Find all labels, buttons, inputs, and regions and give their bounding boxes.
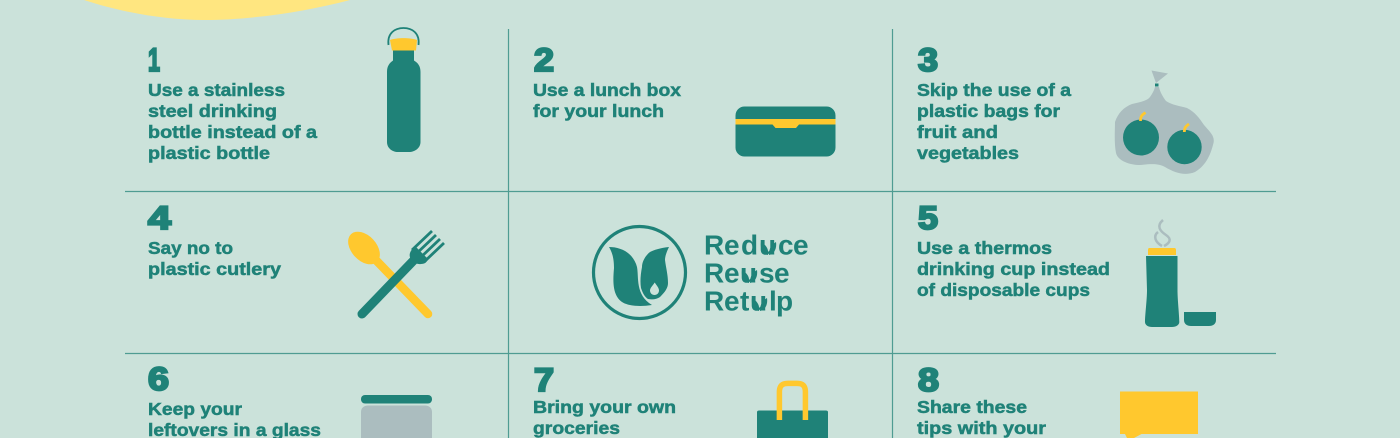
logo wordmark: Reuse — [704, 258, 790, 288]
logo wordmark: Retulp — [704, 286, 793, 316]
text: tip 2: Use a lunch box — [533, 80, 681, 100]
logo wordmark — [704, 230, 809, 316]
panel: tip 2 — [533, 42, 836, 156]
panel: tip 4 — [148, 200, 444, 314]
text: tip 5: Use a thermos — [917, 238, 1052, 258]
text: tip 4 — [148, 238, 281, 279]
icon: spoon and fork — [342, 226, 444, 314]
text: tip 7 — [533, 397, 676, 438]
text: tip 2 — [533, 80, 681, 121]
number 3: 3 — [918, 42, 938, 78]
text: tip 4: plastic cutlery — [148, 259, 281, 279]
text: tip 3 — [917, 80, 1071, 163]
number 1: 1 — [148, 42, 160, 78]
text: tip 7: Bring your own — [533, 397, 676, 417]
number 5: 5 — [918, 200, 938, 236]
number 4: 4 — [148, 200, 171, 236]
text: tip 3: vegetables — [917, 143, 1019, 163]
text: tip 3: fruit and — [917, 122, 998, 142]
text: tip 8: tips with your — [917, 418, 1046, 438]
panel: tip 3 — [917, 42, 1214, 174]
text: tip 1: steel drinking — [148, 101, 277, 121]
text: tip 1: plastic bottle — [148, 143, 270, 163]
panel: tip 8 — [917, 362, 1198, 438]
number 6: 6 — [148, 361, 169, 397]
panel: tip 6 — [148, 361, 432, 438]
icon: glass jar — [361, 395, 432, 438]
text: tip 7: groceries — [533, 418, 620, 438]
logo wordmark: Reduce — [704, 230, 809, 260]
text: tip 4: Say no to — [148, 238, 233, 258]
text: tip 3: Skip the use of a — [917, 80, 1071, 100]
text: tip 2: for your lunch — [533, 101, 664, 121]
icon: plastic bag with apples — [1115, 70, 1214, 174]
icon: steel bottle — [387, 28, 420, 152]
logo emblem — [594, 226, 686, 318]
decorative yellow blob at top — [84, 0, 350, 20]
text: tip 5: of disposable cups — [917, 280, 1090, 300]
icon: lunch box — [736, 106, 836, 156]
panel: tip 1 — [148, 28, 420, 163]
panel: tip 7 — [533, 362, 828, 438]
leaf accents in the letter u — [742, 242, 776, 311]
text: tip 8: Share these — [917, 397, 1027, 417]
text: tip 1 — [148, 80, 317, 163]
text: tip 5: drinking cup instead — [917, 259, 1110, 279]
icon: thermos cup — [1145, 220, 1216, 327]
panel: tip 5 — [917, 200, 1216, 327]
text: tip 6 — [148, 399, 321, 438]
text: tip 3: plastic bags for — [917, 101, 1060, 121]
logo: Reduce Reuse Retulp — [594, 226, 809, 318]
text: tip 6: Keep your — [148, 399, 242, 419]
text: tip 1: bottle instead of a — [148, 122, 317, 142]
number 8: 8 — [918, 362, 939, 398]
icon: shopping bag — [757, 383, 828, 438]
icon: speech bubble — [1120, 392, 1198, 438]
number 7: 7 — [534, 362, 554, 398]
number 2: 2 — [534, 42, 554, 78]
text: tip 5 — [917, 238, 1110, 300]
text: tip 8 — [917, 397, 1046, 438]
text: tip 1: Use a stainless — [148, 80, 285, 100]
